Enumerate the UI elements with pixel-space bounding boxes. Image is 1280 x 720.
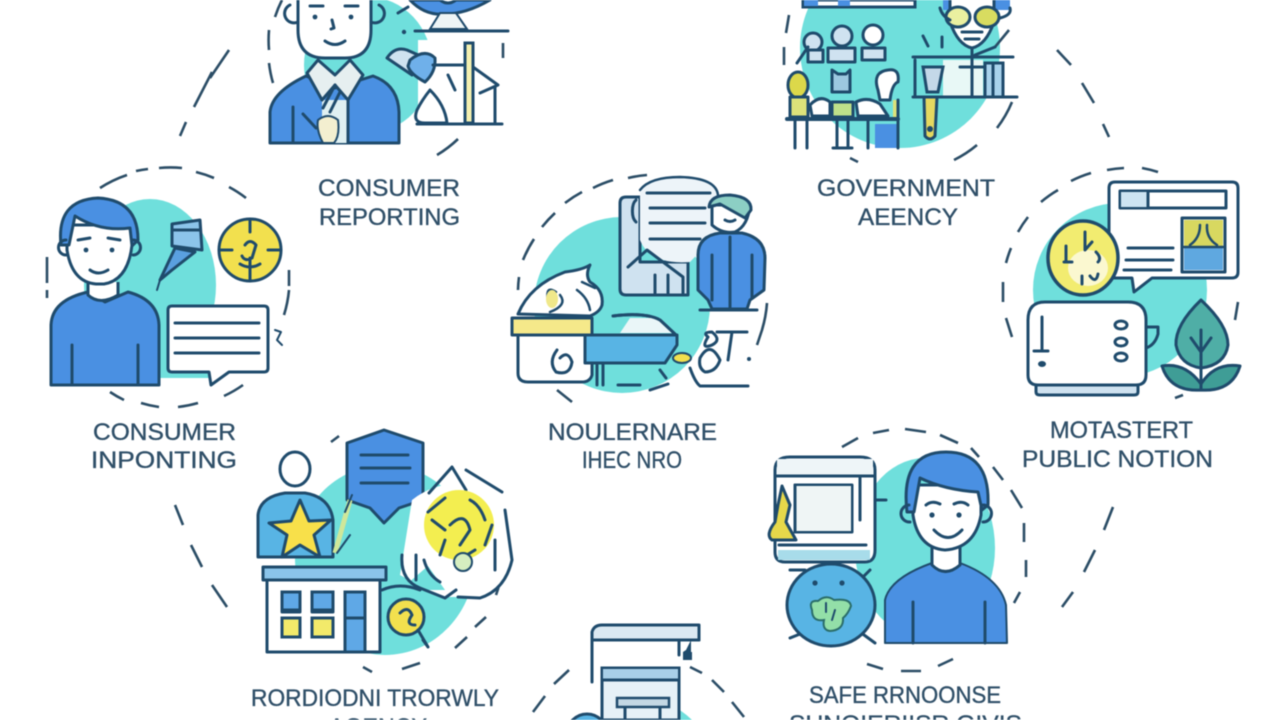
- label: motastert public notion: PUBLIC NOTION: [1022, 446, 1213, 473]
- toaster: [1028, 302, 1158, 395]
- person with star: [258, 452, 333, 557]
- label: center noulernare: IHEC NRO: [582, 447, 682, 474]
- speaker with glasses: [923, 0, 1010, 60]
- label: rating agency: RORDIODNI TRORWLY: [251, 685, 499, 712]
- yellow coin target: [219, 219, 281, 281]
- label: safe response: SAFE RRNOONSE: [809, 682, 1001, 709]
- person: [51, 198, 159, 385]
- label: government agency: [817, 175, 995, 231]
- label: safe response: [789, 682, 1022, 720]
- podium with gavel: [913, 57, 1017, 139]
- person with tie: [270, 0, 399, 143]
- teal blob: [84, 199, 216, 371]
- label: center noulernare: [548, 419, 717, 474]
- audience upper row: [797, 25, 885, 63]
- germ circle: [787, 564, 875, 646]
- large dashed connecting ring: [175, 50, 1113, 717]
- standing man: [698, 195, 765, 310]
- teal blob: [304, 0, 432, 133]
- dashed circle: [47, 167, 289, 407]
- panel: motastert public notion: [1003, 168, 1240, 398]
- dashed circle: [331, 436, 500, 672]
- label: consumer reporting: CONSUMER: [318, 175, 460, 202]
- panel: bottom kitchen unit: [567, 625, 710, 720]
- yellow brain in white bag: [400, 467, 512, 598]
- panel: safe response: [769, 429, 1026, 671]
- wall clock: [1048, 221, 1118, 295]
- building: [263, 567, 386, 652]
- browser speech box: [1109, 182, 1238, 292]
- dashed circle: [1003, 168, 1238, 398]
- shelf: [592, 625, 699, 682]
- label: consumer inponting: CONSUMER: [93, 419, 236, 446]
- dashed circle: [784, 15, 1012, 162]
- panel: consumer reporting: [269, 0, 508, 155]
- bag and balloon: [387, 43, 502, 124]
- audience lower row and desk: [787, 70, 898, 148]
- panel: government agency: [784, 0, 1017, 162]
- panel: rating agency: [258, 430, 512, 672]
- label: motastert public notion: MOTASTERT: [1050, 417, 1193, 444]
- panel: consumer inponting: [47, 167, 289, 407]
- label: center noulernare: NOULERNARE: [548, 419, 717, 446]
- panel: center noulernare: [512, 175, 767, 402]
- silhouette panel with speech bubble: [620, 177, 718, 295]
- teal blob: [855, 458, 995, 638]
- dashed circle: [842, 429, 1026, 671]
- small yellow bulb: [382, 586, 428, 647]
- label: consumer reporting: REPORTING: [319, 204, 460, 231]
- teal blob: [295, 465, 475, 655]
- cabinet: [567, 668, 679, 720]
- label: government agency: AEENCY: [858, 204, 958, 231]
- dashed circle: [269, 0, 503, 155]
- white backing of bag scene: [418, 40, 505, 128]
- speech bubble: [168, 306, 282, 385]
- shelf with figure: [398, 0, 508, 34]
- label: consumer inponting: [91, 419, 237, 474]
- dashed circle: [518, 175, 767, 402]
- shield document: [335, 430, 423, 553]
- teal blob: [1033, 203, 1207, 377]
- label: consumer reporting: [318, 175, 460, 231]
- label: consumer inponting: INPONTING: [91, 447, 237, 474]
- teal blob: [534, 217, 710, 393]
- green leaf plant: [1162, 300, 1240, 390]
- smiling person: [885, 452, 1007, 643]
- top frame: [803, 0, 915, 7]
- scribbled right detail: [673, 332, 751, 386]
- teal blob: [580, 700, 710, 720]
- oven: [769, 457, 886, 562]
- brush icon: [157, 220, 202, 290]
- teal blob: [800, 0, 1000, 148]
- label: government agency: GOVERNMENT: [817, 175, 995, 202]
- basket with mound: [512, 265, 602, 382]
- blue tub: [585, 315, 677, 390]
- label: motastert public notion: [1022, 417, 1213, 473]
